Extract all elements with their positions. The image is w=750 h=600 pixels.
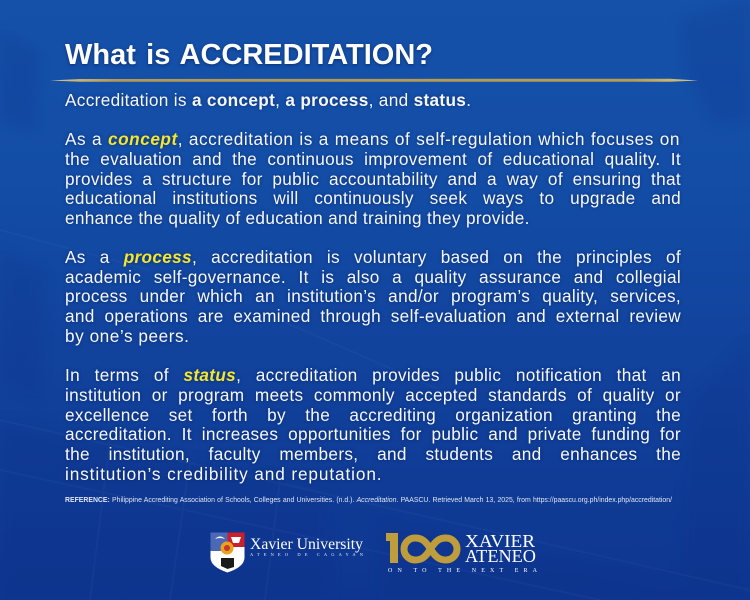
paragraph: concept: As a concept, accreditation is a means of self-regulation which focuses on [65, 129, 680, 149]
paragraph: process: academic self-governance. It is also a quality assurance and collegial [65, 267, 681, 287]
paragraph: status: institution’s credibility and reputation. [65, 464, 382, 484]
number 100 with infinity zeros [386, 537, 457, 563]
gold title rule [50, 78, 698, 82]
title: What is ACCREDITATION? [65, 39, 433, 71]
paragraph: concept: enhance the quality of education and training they provide. [65, 208, 530, 228]
paragraph: concept: educational institutions will continuously seek ways to upgrade and [65, 188, 681, 208]
wordmark: XAVIER [465, 531, 535, 551]
wordmark: ATENEO [465, 546, 536, 566]
wordmark [388, 531, 538, 574]
paragraph: process: process under which an institution’s and/or program’s quality, services, [65, 286, 681, 306]
icon: university shield [210, 532, 244, 572]
paragraph: concept [64, 129, 681, 228]
paragraph: process: As a process, accreditation is voluntary based on the principles of [65, 247, 681, 267]
wordmark: ON TO THE NEXT ERA [388, 568, 538, 574]
reference citation: REFERENCE: Philippine Accrediting Association of Schools, Colleges and Universities. (n.d.). Accreditation. PAASCU. Retrieved March 13, 2025, from https://paascu.org.ph/index.php/accreditation/ [65, 497, 672, 504]
paragraph: concept: provides a structure for public accountability and a way of ensuring that [65, 168, 681, 188]
paragraph: status: institution or program meets commonly accepted standards of quality or [65, 385, 681, 405]
paragraph: status: excellence set forth by the accrediting organization granting the [65, 405, 681, 425]
wordmark: ATENEO DE CAGAYAN [250, 552, 364, 557]
paragraph: process [64, 247, 682, 346]
paragraph: concept: the evaluation and the continuous improvement of educational quality. It [65, 149, 681, 169]
wordmark: Xavier University [250, 536, 363, 553]
intro line: Accreditation is a concept, a process, and status. [65, 90, 471, 110]
paragraph: process: and operations are examined through self-evaluation and external review [65, 306, 681, 326]
paragraph: process: by one’s peers. [65, 326, 190, 346]
logo: Xavier University [210, 532, 364, 572]
paragraph: status: In terms of status, accreditation provides public notification that an [65, 365, 681, 385]
logo: Xavier Ateneo 100 [386, 531, 538, 574]
paragraph: status: the institution, faculty members, and students and enhances the [65, 444, 681, 464]
paragraph: status: accreditation. It increases opportunities for public and private funding for [65, 424, 681, 444]
